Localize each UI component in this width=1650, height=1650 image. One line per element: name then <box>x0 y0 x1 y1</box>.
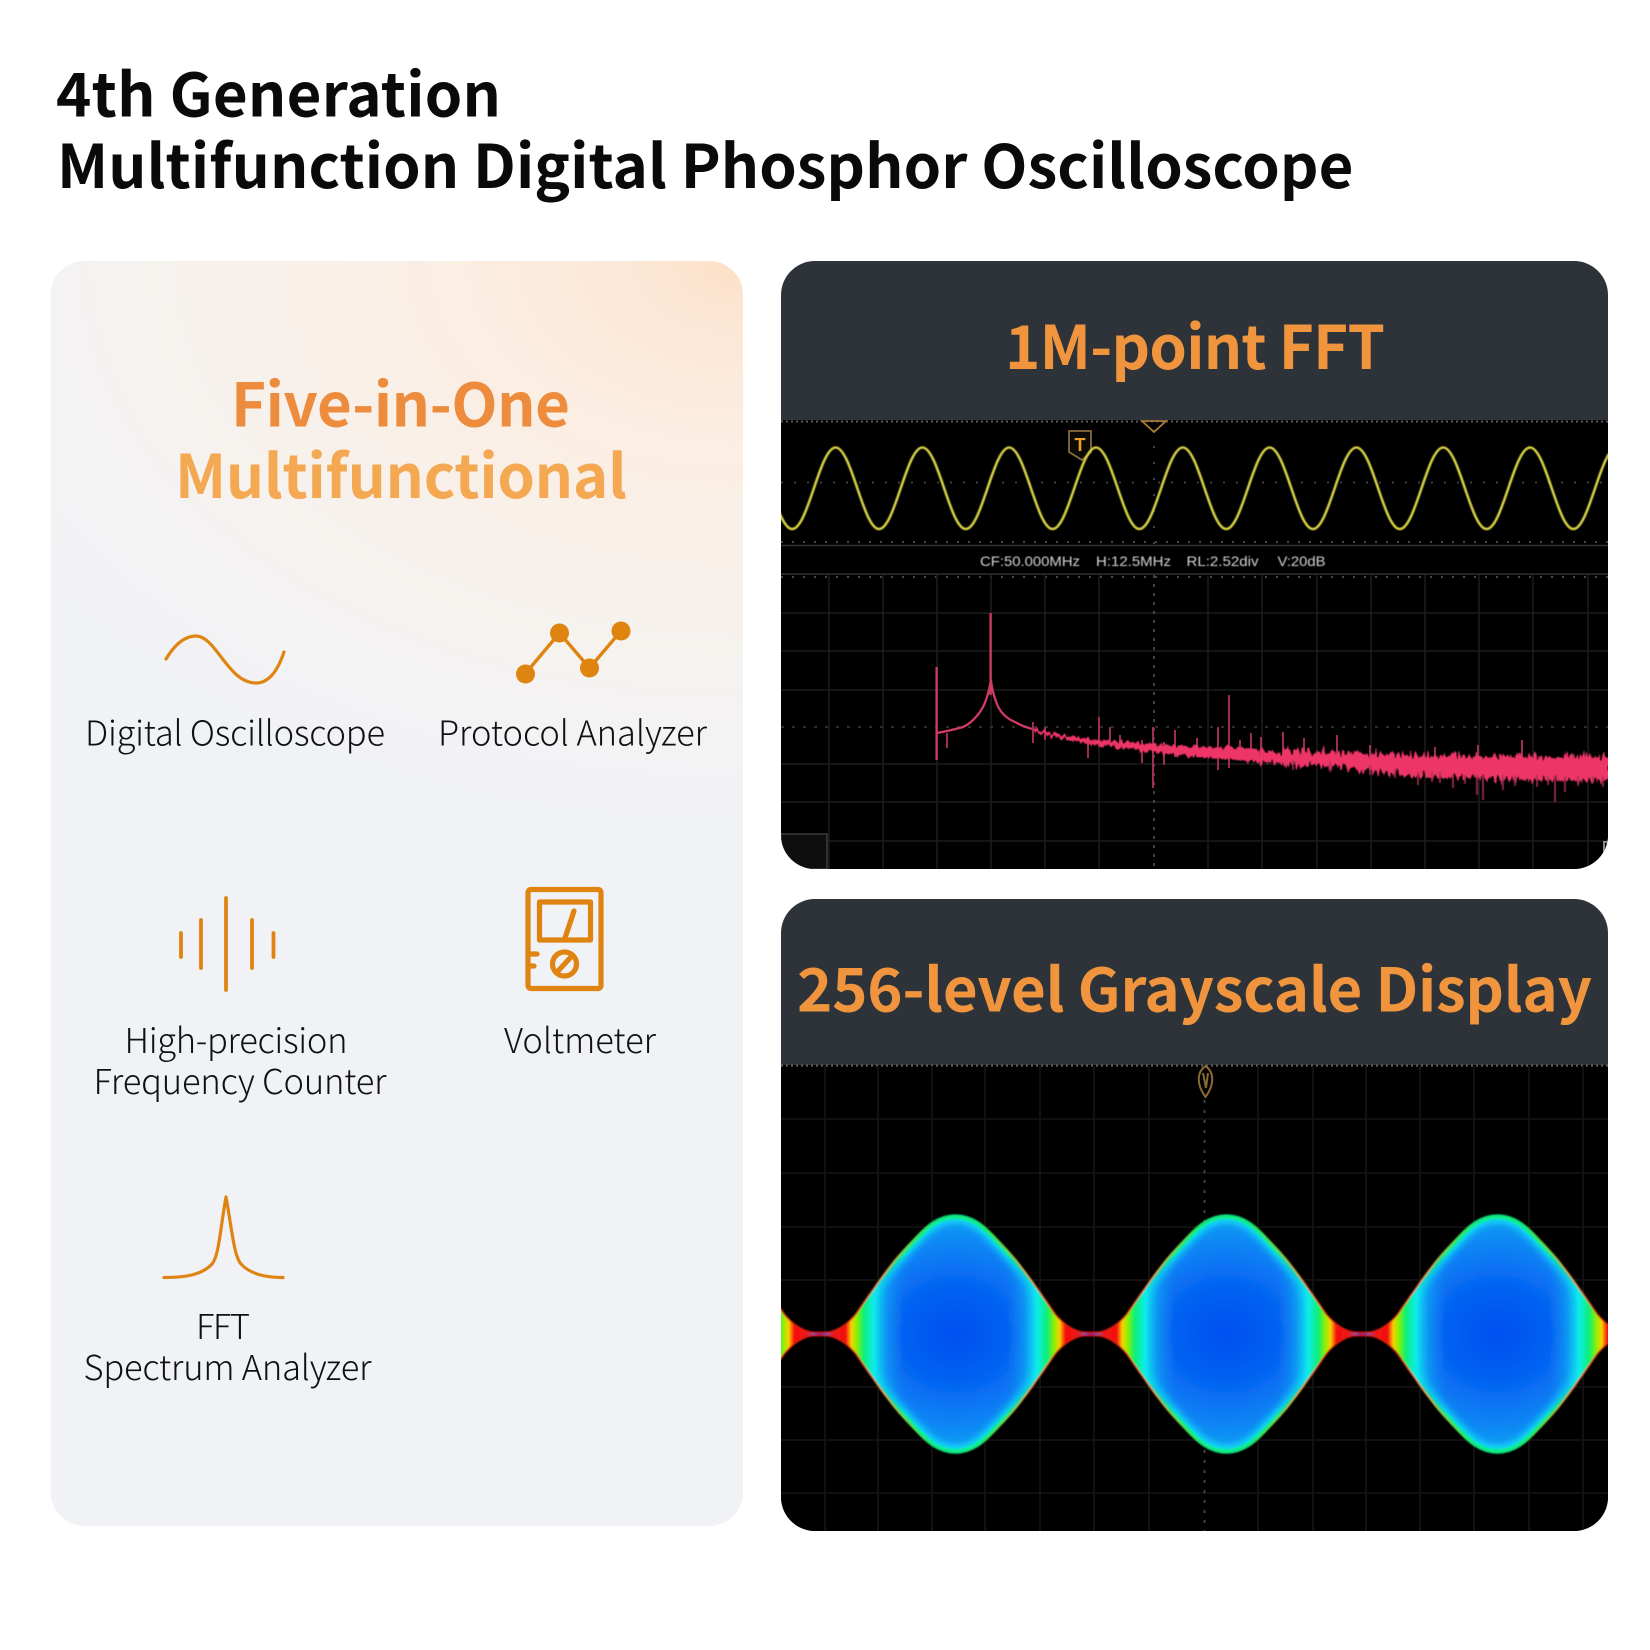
panel: 256-level grayscale <box>781 899 1608 1531</box>
icon: frequency counter <box>181 898 274 990</box>
fft spectrum trace <box>937 613 1612 802</box>
marker: V <box>1199 1066 1212 1097</box>
icon: protocol analyzer <box>516 622 630 684</box>
label: frequency counter: High-precision <box>124 1013 348 1063</box>
label: frequency counter <box>94 1013 387 1104</box>
marker: T: T <box>1074 435 1086 455</box>
panel heading: 256-level Grayscale Display <box>797 942 1592 1030</box>
title <box>56 48 1354 206</box>
title: 4th Generation <box>56 48 501 134</box>
panel: 1M-point FFT <box>749 261 1617 869</box>
icon: fft peak <box>164 1197 283 1278</box>
bottom-right tab <box>1604 842 1608 853</box>
marker: trigger position <box>1142 421 1166 432</box>
icon: sine wave <box>166 636 284 683</box>
fft readout: H:12.5MHz <box>1096 553 1171 569</box>
fft readout: CF:50.000MHz <box>980 553 1080 569</box>
persistence waveform lobes <box>781 1213 1608 1455</box>
panel heading: Five-in-One <box>231 358 570 444</box>
fft readout: V:20dB <box>1278 553 1326 569</box>
fft readout <box>980 555 1326 567</box>
label: fft spectrum analyzer: Spectrum Analyzer <box>84 1340 372 1390</box>
title: Multifunction Digital Phosphor Oscilloscope <box>57 119 1354 206</box>
fft readout: RL:2.52div <box>1186 553 1258 569</box>
panel heading: Multifunctional <box>175 429 627 516</box>
bottom-left tab <box>781 834 827 869</box>
scope screen <box>749 420 1617 869</box>
label: fft spectrum analyzer: FFT <box>196 1299 250 1349</box>
icon: voltmeter <box>528 890 601 988</box>
label: digital oscilloscope: Digital Oscilloscope <box>85 706 385 756</box>
label: frequency counter: Frequency Counter <box>94 1054 387 1104</box>
panel heading <box>175 358 627 516</box>
waveform: yellow sine <box>749 448 1617 529</box>
scope screen <box>781 1064 1608 1531</box>
marker: T <box>1069 431 1091 460</box>
label: fft spectrum analyzer <box>84 1299 372 1390</box>
label: protocol analyzer: Protocol Analyzer <box>438 706 708 756</box>
panel heading: 1M-point FFT <box>1005 300 1385 387</box>
panel: five-in-one <box>50 261 743 1526</box>
label: voltmeter: Voltmeter <box>504 1013 657 1063</box>
